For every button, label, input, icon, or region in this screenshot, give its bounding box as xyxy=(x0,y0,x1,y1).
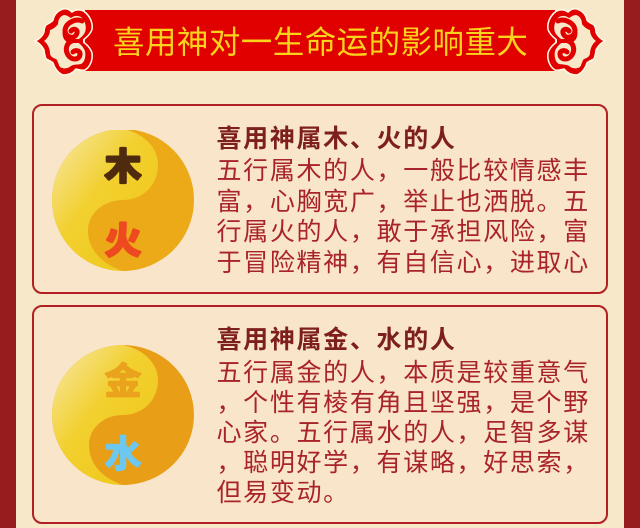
icon: left cloud ornament xyxy=(34,8,93,76)
text: metal and water: 心家。五行属水的人，足智多谋 xyxy=(216,419,590,447)
text: metal and water: ，聪明好学，有谋略，好思索， xyxy=(216,449,590,477)
label: wood: 木 xyxy=(105,146,141,187)
text: metal and water: ，个性有棱有角且坚强，是个野 xyxy=(216,389,590,417)
title banner xyxy=(85,10,555,71)
title: 喜用神对一生命运的影响重大 xyxy=(113,24,528,60)
text: wood and fire xyxy=(216,157,590,277)
text: wood and fire: 富，心胸宽广，举止也洒脱。五 xyxy=(216,188,590,216)
heading: wood and fire: 喜用神属木、火的人 xyxy=(216,125,457,153)
right border xyxy=(624,0,640,528)
icon: yin-yang metal and water xyxy=(52,345,194,485)
label: fire: 火 xyxy=(105,220,141,261)
text: wood and fire: 于冒险精神，有自信心，进取心 xyxy=(216,249,590,277)
text: wood and fire: 行属火的人，敢于承担风险，富 xyxy=(216,218,590,246)
text: metal and water xyxy=(216,359,590,507)
text: metal and water: 五行属金的人，本质是较重意气 xyxy=(216,359,590,387)
panel: wood and fire xyxy=(32,104,608,294)
text: metal and water: 但易变动。 xyxy=(216,479,350,507)
label: water: 水 xyxy=(104,434,142,475)
label: metal: 金 xyxy=(104,361,142,402)
icon: right cloud ornament xyxy=(547,8,607,76)
text: wood and fire: 五行属木的人，一般比较情感丰 xyxy=(216,157,590,185)
icon: yin-yang wood and fire xyxy=(52,130,194,271)
heading: metal and water: 喜用神属金、水的人 xyxy=(216,326,457,354)
left border xyxy=(0,0,16,528)
panel: metal and water xyxy=(32,305,608,524)
